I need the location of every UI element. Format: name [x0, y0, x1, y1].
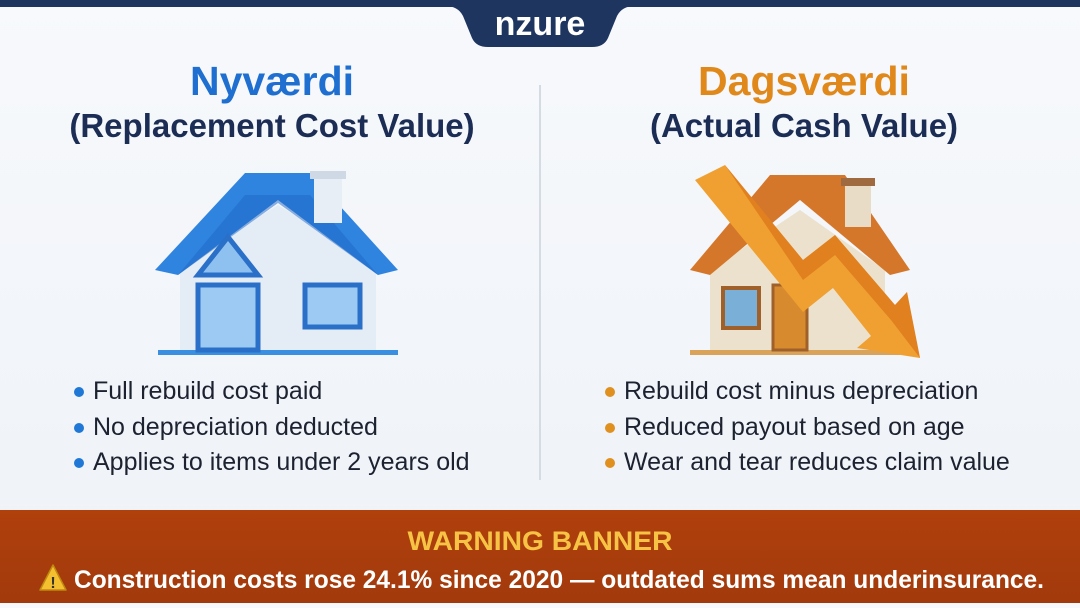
bullets: replacement cost: Full rebuild cost paid — [93, 377, 322, 405]
heading: Dagsværdi: (Actual Cash Value) — [650, 107, 958, 144]
heading: Nyværdi: (Replacement Cost Value) — [69, 107, 475, 144]
bullets: actual cash value: Reduced payout based on age — [624, 412, 965, 440]
bullets: replacement cost: No depreciation deducted — [93, 412, 378, 440]
top bar with logo — [0, 0, 1080, 47]
heading: Nyværdi — [69, 58, 475, 144]
bullets: replacement cost: Applies to items under 2 years old — [93, 448, 470, 476]
bullets: replacement cost — [74, 377, 470, 476]
icon: depreciating house with arrow — [690, 165, 920, 358]
bullets: actual cash value — [605, 377, 1010, 476]
heading: Dagsværdi — [650, 58, 958, 144]
divider — [539, 85, 541, 480]
warning text: Construction costs rose 24.1% since 2020 — outdated sums mean underinsurance. — [74, 566, 1044, 594]
banner heading: WARNING BANNER — [408, 526, 672, 556]
heading: Nyværdi: Nyværdi — [190, 58, 354, 104]
heading: Dagsværdi: Dagsværdi — [698, 58, 910, 104]
logo text: nzure — [495, 5, 585, 43]
warning banner — [0, 510, 1080, 603]
icon: warning: ! — [50, 575, 56, 592]
bullets: actual cash value: Wear and tear reduces claim value — [624, 448, 1010, 476]
icon: blue house — [155, 171, 398, 355]
icon: warning — [40, 565, 66, 592]
bullets: actual cash value: Rebuild cost minus depreciation — [624, 377, 978, 405]
